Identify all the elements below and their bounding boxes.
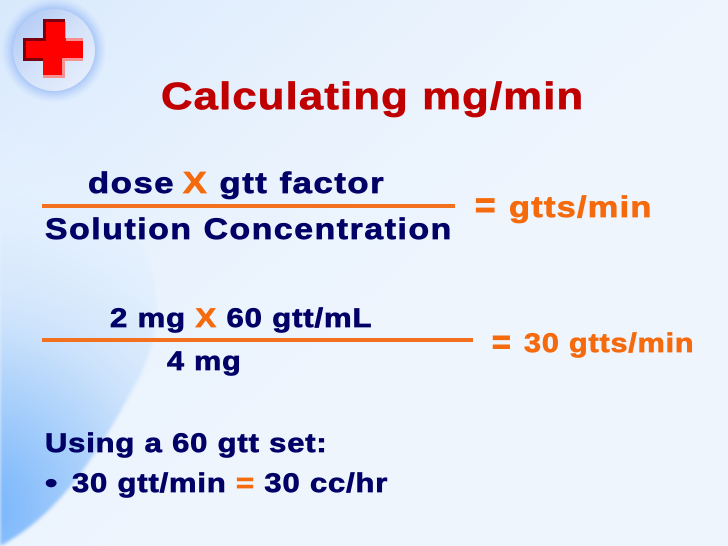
equals sign: first result: =	[475, 186, 495, 225]
note: 60 gtt set	[45, 428, 388, 498]
fraction bar	[42, 338, 473, 342]
icon: red cross badge	[1, 0, 107, 103]
bullet: •	[45, 468, 57, 498]
denominator: Solution Concentration	[45, 213, 453, 246]
equals sign: second result: =	[492, 324, 511, 360]
result: gtts/min: gtts/min	[509, 191, 653, 224]
bullet conversion: 30 gtt/min = 30 cc/hr	[72, 468, 388, 498]
title: Calculating mg/min	[161, 76, 584, 118]
fraction bar	[42, 204, 455, 208]
denominator value: 4 mg	[167, 346, 242, 376]
numerator: dose X gtt factor	[88, 165, 385, 200]
formula: worked example	[42, 303, 473, 376]
numerator values: 2 mg X 60 gtt/mL	[110, 303, 372, 333]
formula: general fraction	[42, 165, 455, 246]
result: 30 gtts/min: 30 gtts/min	[524, 328, 694, 358]
note heading: Using a 60 gtt set:	[45, 428, 328, 458]
